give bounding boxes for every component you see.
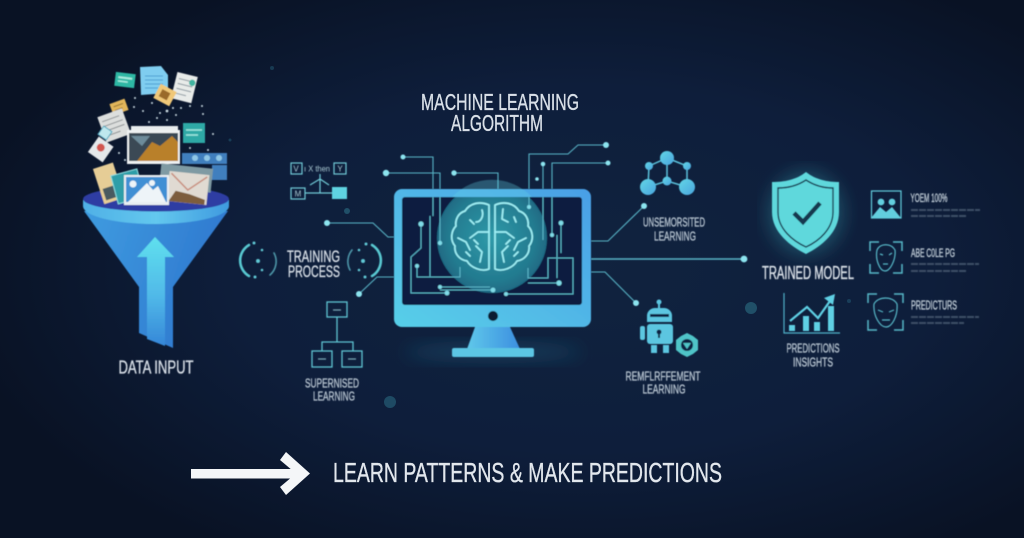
particles (118, 97, 214, 161)
icon: face scan one (870, 242, 902, 273)
circuit lines (324, 142, 747, 306)
panel: trained model (762, 171, 854, 370)
bottom caption: LEARN PATTERNS & MAKE PREDICTIONS (333, 457, 722, 488)
blue document (140, 66, 168, 95)
icon: decision tree: V (293, 164, 299, 174)
funnel rim band (83, 200, 229, 224)
monitor frame (394, 189, 591, 327)
teal card (114, 72, 136, 88)
blue landscape photo (124, 175, 169, 205)
panel: result list (868, 191, 980, 330)
label: reinforcement learning: REMFLRFFEMENT (626, 368, 701, 384)
panel: reinforcement learning (626, 300, 701, 396)
monitor floor glow (403, 345, 583, 359)
grey document (97, 108, 131, 143)
label: supervised learning (305, 376, 359, 404)
monitor base (452, 348, 534, 357)
panel: unsupervised learning (640, 151, 705, 244)
icon: network (640, 151, 695, 195)
funnel opening (83, 186, 229, 212)
icon: decision tree: M (295, 190, 302, 198)
background dots (228, 66, 851, 408)
title (421, 89, 579, 136)
result three: PREDICTURS (911, 298, 957, 312)
white document (171, 72, 198, 103)
panel: computer monitor (394, 180, 591, 359)
photo stack (131, 126, 178, 132)
panel: data input funnel (83, 66, 229, 378)
icon: robot (640, 300, 698, 357)
label: unsupervised learning (643, 214, 705, 244)
grey photo (159, 163, 213, 193)
label: predictions insights: INSIGHTS (793, 354, 833, 370)
label: predictions insights (786, 340, 840, 370)
icon: shield (772, 172, 839, 254)
teal chart card (183, 123, 205, 143)
yellow card (109, 99, 129, 115)
label: training process (287, 248, 340, 281)
beige folder (93, 162, 124, 204)
icon: decision tree: ı X then (304, 164, 330, 174)
result one: YOEM 100% (910, 191, 948, 205)
arrow: bottom white arrow (191, 452, 310, 495)
icon: decision tree (291, 163, 347, 199)
icon: face scan two (868, 294, 903, 330)
orange note (153, 84, 177, 106)
icon: hierarchy (312, 302, 362, 367)
brain glow orb (437, 183, 547, 293)
data documents (88, 66, 227, 205)
icon: right progress ring (348, 242, 381, 278)
beige photo (167, 171, 209, 205)
screen circuits (411, 197, 573, 296)
label: reinforcement learning (626, 368, 701, 396)
funnel cone (84, 211, 228, 348)
label: unsupervised learning: LEARNING (654, 228, 696, 244)
label: data input: DATA INPUT (118, 356, 194, 378)
result two: ABE C0LE PG (911, 246, 955, 260)
label: training process: PROCESS (288, 263, 340, 281)
label: unsupervised learning: UNSEMORSITED (643, 214, 705, 230)
icon: growth chart (784, 293, 840, 333)
monitor screen (402, 197, 582, 305)
icon: picture people (871, 191, 901, 218)
icon: left progress ring (240, 242, 276, 278)
monitor button (488, 311, 498, 321)
title: ALGORITHM (451, 110, 543, 136)
title: MACHINE LEARNING (421, 89, 579, 115)
label: training process: TRAINING (287, 248, 340, 266)
label: supervised learning: LEARNING (313, 388, 355, 404)
panel: training process (240, 163, 381, 281)
panel: supervised learning (305, 302, 362, 404)
label: trained model: TRAINED MODEL (762, 263, 854, 283)
blue strip cards (182, 153, 227, 164)
small badge (98, 126, 112, 140)
teal photo (111, 169, 144, 204)
label: reinforcement learning: LEARNING (642, 382, 686, 396)
icon: brain (452, 203, 532, 270)
label: supervised learning: SUPERNISED (305, 376, 359, 390)
upward arrow (137, 237, 174, 346)
label: predictions insights: PREDICTIONS (786, 340, 840, 356)
orb upper cap (452, 180, 532, 197)
small white document (88, 136, 114, 162)
monitor stand (467, 327, 520, 349)
shield glow (768, 171, 844, 255)
icon: decision tree: Y (337, 164, 343, 174)
